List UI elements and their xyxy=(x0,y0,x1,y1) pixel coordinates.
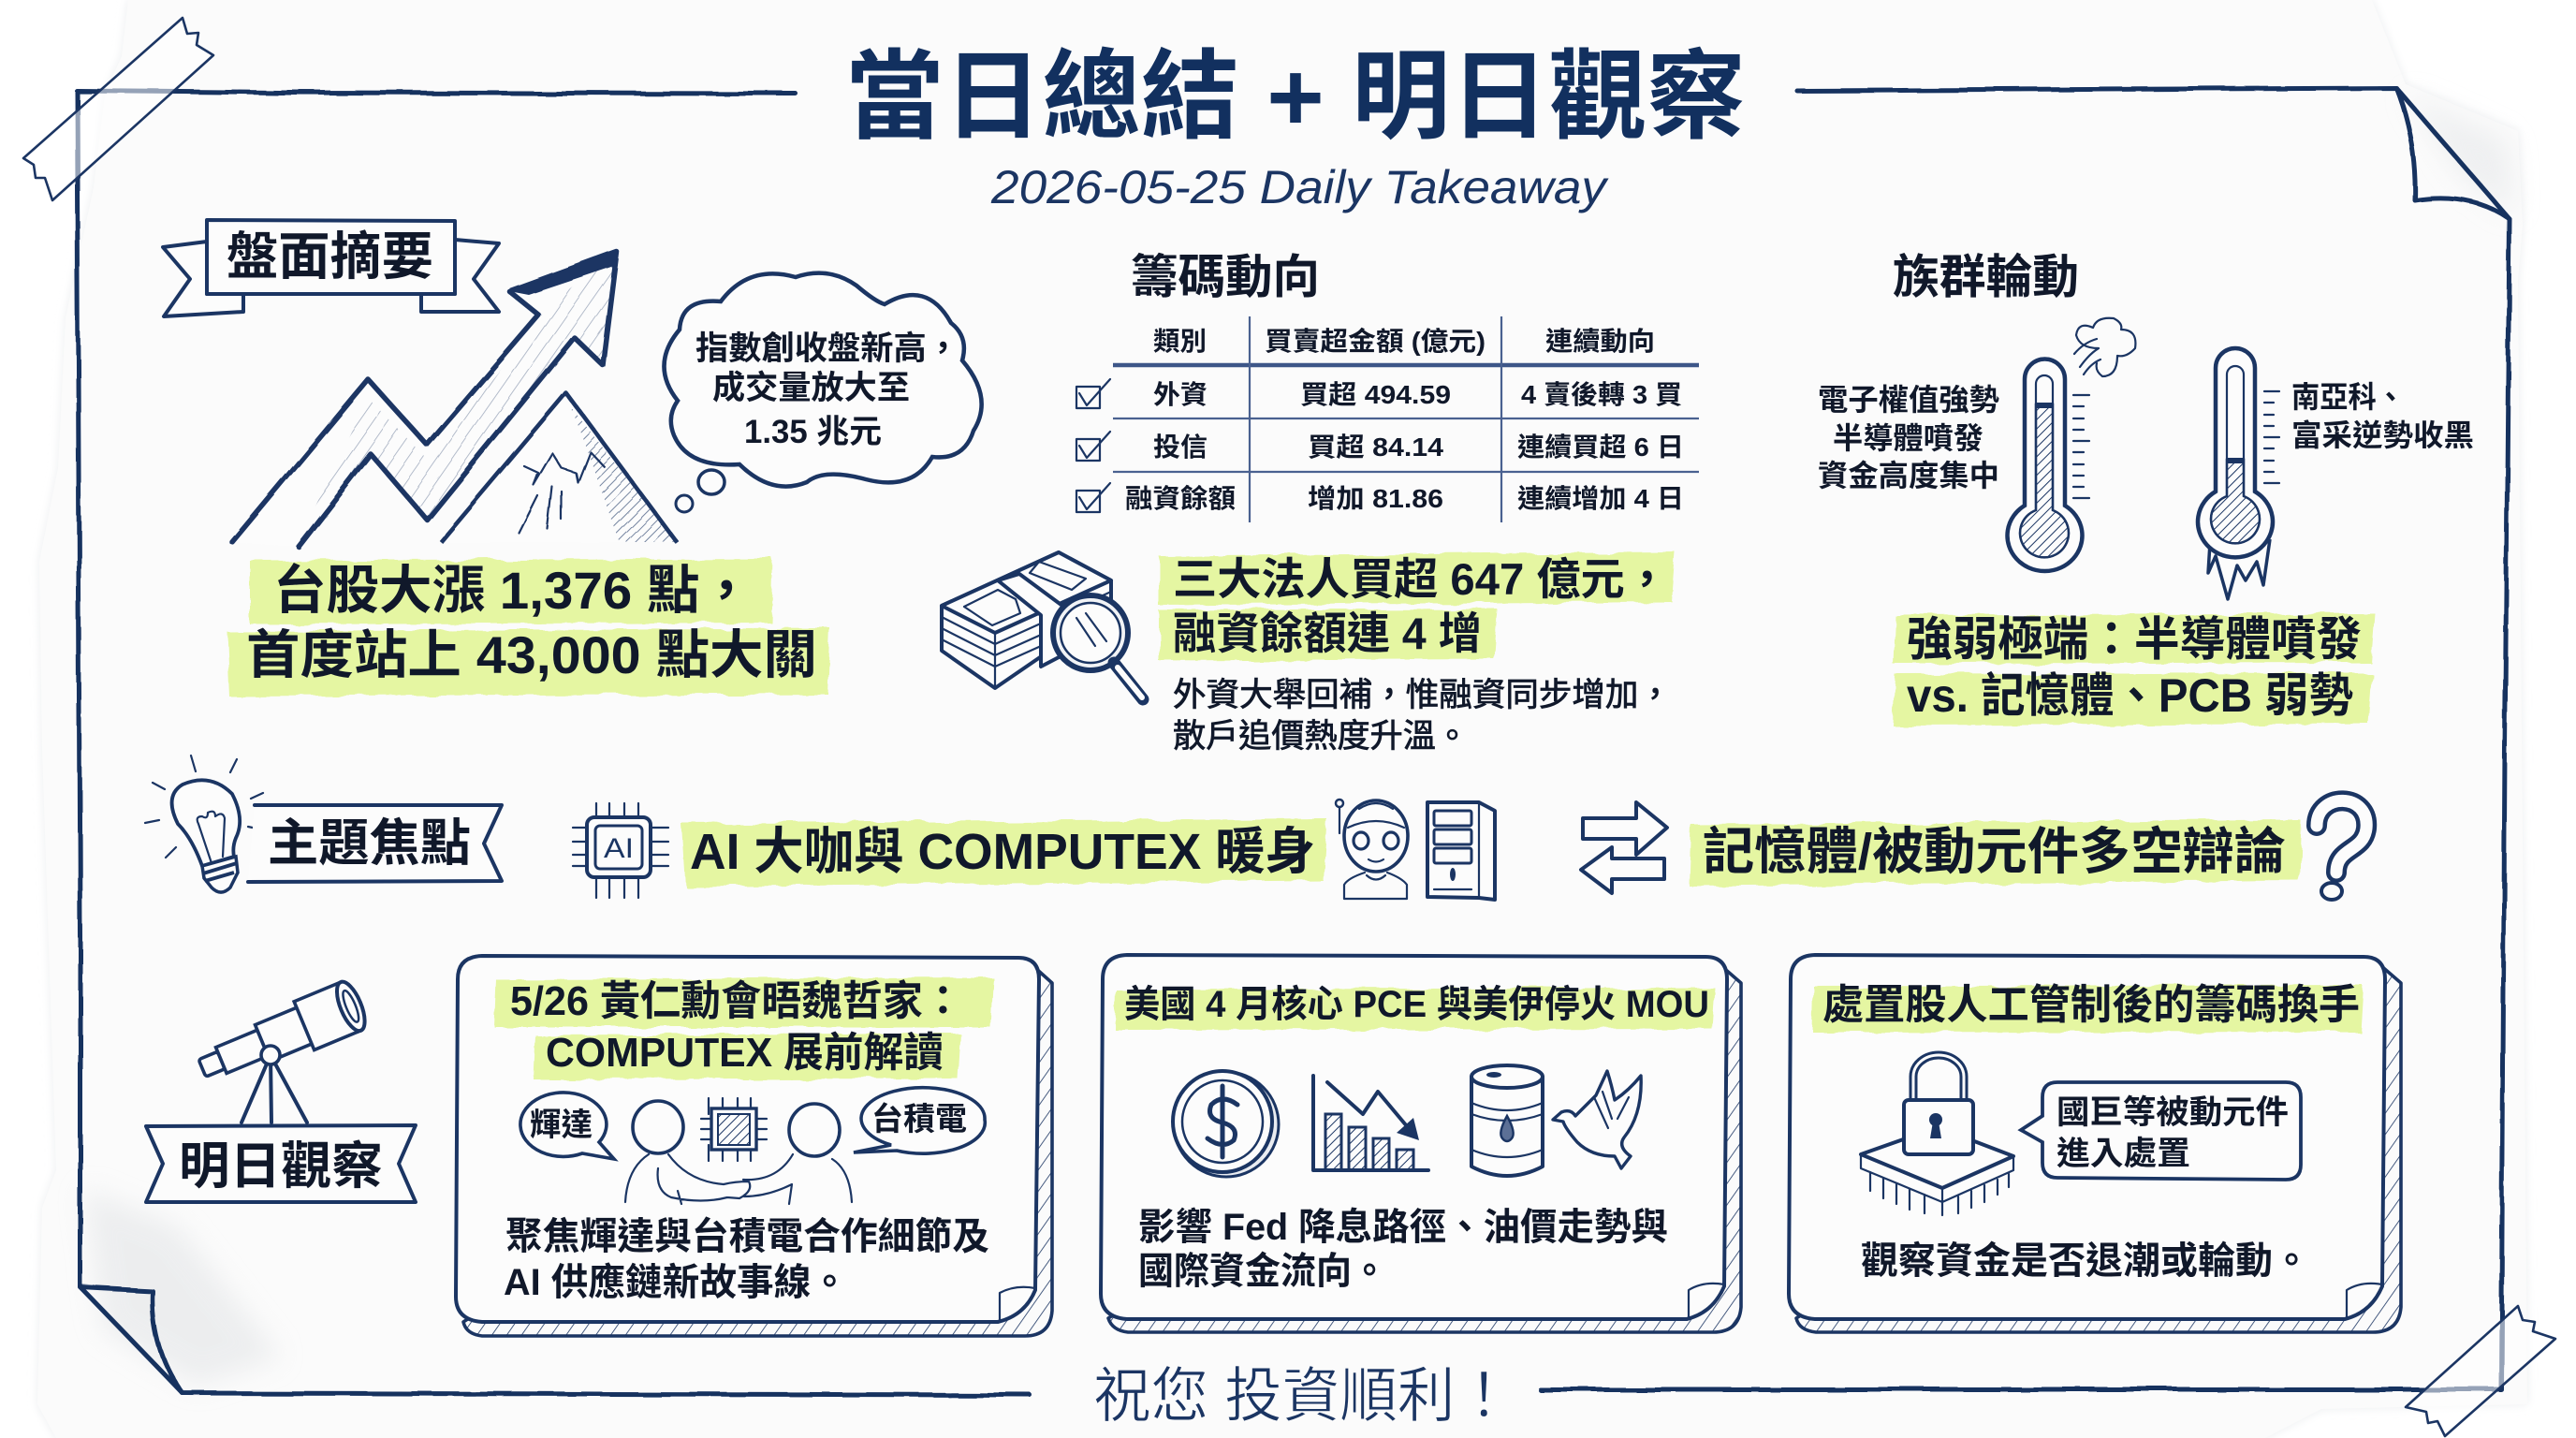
icon: rising arrow and mountain xyxy=(232,252,677,547)
row: foreign: 4 賣後轉 3 買 xyxy=(1521,380,1682,409)
banner label: 盤面摘要 xyxy=(227,227,433,286)
chart: falling bars xyxy=(1313,1076,1428,1170)
text: flow commentary: 散戶追價熱度升溫。 xyxy=(1173,718,1469,755)
key takeaway: institutions xyxy=(1159,552,1676,661)
text: strong sectors xyxy=(1818,383,1999,492)
banner label: 明日觀察 xyxy=(179,1138,383,1195)
key takeaway: rotation: vs. 記憶體、PCB 弱勢 xyxy=(1907,669,2353,722)
row: margin balance: 增加 81.86 xyxy=(1308,484,1443,513)
row: margin balance: 融資餘額 xyxy=(1125,484,1236,513)
callout text: 國巨等被動元件 xyxy=(2056,1094,2289,1131)
highlight: debate headline: 記憶體/被動元件多空辯論 xyxy=(1703,824,2286,880)
cloud text: 指數創收盤新高， xyxy=(695,330,959,367)
key takeaway: institutions: 三大法人買超 647 億元， xyxy=(1173,554,1669,604)
card heading: COMPUTEX 展前解讀 xyxy=(546,1030,944,1076)
card body text: 聚焦輝達與台積電合作細節及 xyxy=(505,1216,989,1257)
key takeaway: index: 首度站上 43,000 點大關 xyxy=(246,625,817,684)
key takeaway: index xyxy=(227,559,830,697)
title: 當日總結 + 明日觀察 xyxy=(845,43,1746,152)
speech bubble: Nvidia: 輝達 xyxy=(530,1108,593,1143)
icon: hot thermometer xyxy=(2008,318,2135,571)
card body text xyxy=(504,1216,989,1303)
callout: Yageo disposition xyxy=(2021,1082,2301,1180)
callout text: 進入處置 xyxy=(2056,1136,2190,1172)
card body text: AI 供應鏈新故事線。 xyxy=(504,1262,848,1303)
heading: chip flows: 籌碼動向 xyxy=(1131,251,1320,303)
icon: oil barrel xyxy=(1471,1065,1543,1176)
row: margin balance: 連續增加 4 日 xyxy=(1517,484,1684,513)
callout text xyxy=(2056,1094,2289,1172)
icon: telescope xyxy=(192,978,371,1123)
speech bubble: TSMC xyxy=(854,1088,985,1153)
highlight: AI headline: AI 大咖與 COMPUTEX 暖身 xyxy=(690,824,1315,880)
icon: cash stack with magnifier xyxy=(942,552,1143,699)
speech bubble: TSMC: 台積電 xyxy=(871,1102,967,1137)
key takeaway: index: 台股大漲 1,376 點， xyxy=(273,561,753,620)
icon: locked chip xyxy=(1861,1055,2013,1215)
row: investment trust: 投信 xyxy=(1153,433,1208,462)
banner: market summary xyxy=(163,220,499,316)
text: strong sectors: 半導體噴發 xyxy=(1833,421,1983,455)
card body text: 影響 Fed 降息路徑、油價走勢與 xyxy=(1138,1207,1668,1248)
cloud text xyxy=(695,330,959,450)
row: investment trust: 連續買超 6 日 xyxy=(1517,433,1684,462)
cloud text: 1.35 兆元 xyxy=(744,414,882,450)
banner: tomorrow watch xyxy=(146,1125,416,1202)
banner label: 主題焦點 xyxy=(268,815,471,872)
callout: thought cloud xyxy=(664,273,982,512)
icon: AI chip: AI xyxy=(604,833,634,864)
card heading: 美國 4 月核心 PCE 與美伊停火 MOU xyxy=(1124,984,1709,1025)
table header: 類別 xyxy=(1153,327,1207,356)
panel: disposition stocks xyxy=(1789,955,2401,1332)
icon: dollar coin xyxy=(1173,1071,1279,1177)
footer message: 祝您 投資順利！ xyxy=(1093,1362,1513,1430)
icon: AI chip xyxy=(573,803,668,898)
icon: dove xyxy=(1553,1071,1641,1168)
text: strong sectors: 資金高度集中 xyxy=(1818,459,1999,492)
card heading: 處置股人工管制後的籌碼換手 xyxy=(1822,982,2360,1028)
tape bottom-right xyxy=(2406,1306,2555,1436)
icon: light bulb xyxy=(145,756,263,892)
row: investment trust: 買超 84.14 xyxy=(1308,433,1443,462)
icon: swap arrows xyxy=(1581,802,1667,893)
card body text xyxy=(1138,1207,1668,1292)
icon: server tower xyxy=(1427,802,1495,900)
banner: theme focus xyxy=(248,805,502,882)
text: weak sectors: 富采逆勢收黑 xyxy=(2291,418,2474,452)
text: weak sectors xyxy=(2291,380,2474,452)
text: flow commentary xyxy=(1173,677,1672,755)
illustration: handshake with chip xyxy=(625,1098,852,1204)
text: weak sectors: 南亞科、 xyxy=(2291,380,2405,414)
card heading: 5/26 黃仁勳會晤魏哲家： xyxy=(510,978,963,1024)
key takeaway: rotation xyxy=(1893,613,2375,726)
icon: question mark xyxy=(2317,800,2366,900)
row: investment trust xyxy=(1076,432,1684,462)
card body text: 觀察資金是否退潮或輪動。 xyxy=(1861,1240,2310,1282)
icon: robot xyxy=(1336,800,1408,899)
row: foreign: 外資 xyxy=(1153,380,1208,409)
text: flow commentary: 外資大舉回補，惟融資同步增加， xyxy=(1173,677,1672,713)
card body text: 國際資金流向。 xyxy=(1138,1251,1387,1292)
tape top-left xyxy=(23,18,213,200)
cloud text: 成交量放大至 xyxy=(712,370,910,406)
text: strong sectors: 電子權值強勢 xyxy=(1818,383,1999,417)
table header: 買賣超金額 (億元) xyxy=(1265,327,1486,356)
key takeaway: rotation: 強弱極端：半導體噴發 xyxy=(1907,613,2362,666)
row: foreign xyxy=(1076,379,1682,409)
panel: Jensen Huang meeting xyxy=(456,956,1052,1336)
table header xyxy=(1153,327,1655,356)
card heading xyxy=(494,977,993,1079)
speech bubble: Nvidia xyxy=(520,1093,614,1159)
table: institutional flows xyxy=(1076,316,1699,522)
row: margin balance xyxy=(1076,483,1684,513)
subtitle date: 2026-05-25 Daily Takeaway xyxy=(990,161,1609,213)
key takeaway: institutions: 融資餘額連 4 增 xyxy=(1173,609,1482,658)
icon: frozen thermometer xyxy=(2198,348,2279,599)
heading: sector rotation: 族群輪動 xyxy=(1893,251,2079,303)
panel: US PCE and ceasefire xyxy=(1101,955,1741,1332)
row: foreign: 買超 494.59 xyxy=(1300,380,1451,409)
table header: 連續動向 xyxy=(1545,327,1655,356)
